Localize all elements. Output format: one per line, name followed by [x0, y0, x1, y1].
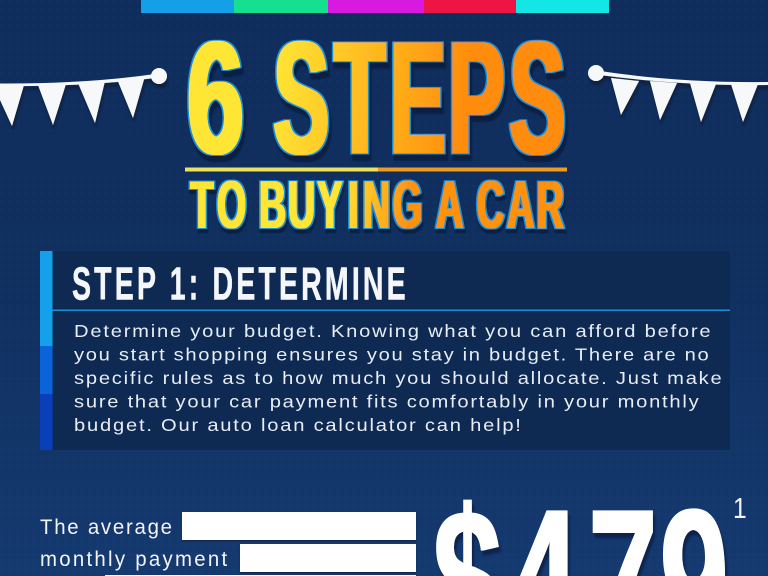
statistic label: monthly payment	[40, 548, 227, 571]
statistic: average monthly payment	[40, 498, 746, 576]
footnote marker: 1	[733, 492, 747, 524]
panel: step 1	[40, 251, 730, 450]
step body text: specific rules as to how much you should allocate. Just make	[74, 369, 722, 389]
subtitle: to buying a car: TO BUYING A CAR	[191, 166, 564, 243]
white bars	[105, 512, 416, 576]
title	[185, 9, 567, 243]
statistic label	[40, 516, 227, 571]
step body text	[74, 322, 722, 436]
title: 6 steps: STEPS	[274, 10, 565, 188]
step heading: STEP 1: DETERMINE	[72, 259, 409, 310]
statistic label: The average	[40, 516, 172, 539]
title: 6 steps: 6	[187, 9, 244, 188]
title divider	[185, 168, 567, 172]
panel background	[52, 251, 730, 450]
step body text: budget. Our auto loan calculator can help!	[74, 416, 521, 436]
panel accent bar	[40, 251, 52, 450]
top colour bar	[141, 0, 609, 13]
step body text: Determine your budget. Knowing what you can afford before	[74, 322, 711, 342]
right bunting	[588, 65, 768, 122]
left bunting	[0, 68, 167, 126]
step body text: sure that your car payment fits comfortably in your monthly	[74, 392, 699, 412]
step body text: you start shopping ensures you stay in budget. There are no	[74, 345, 709, 365]
